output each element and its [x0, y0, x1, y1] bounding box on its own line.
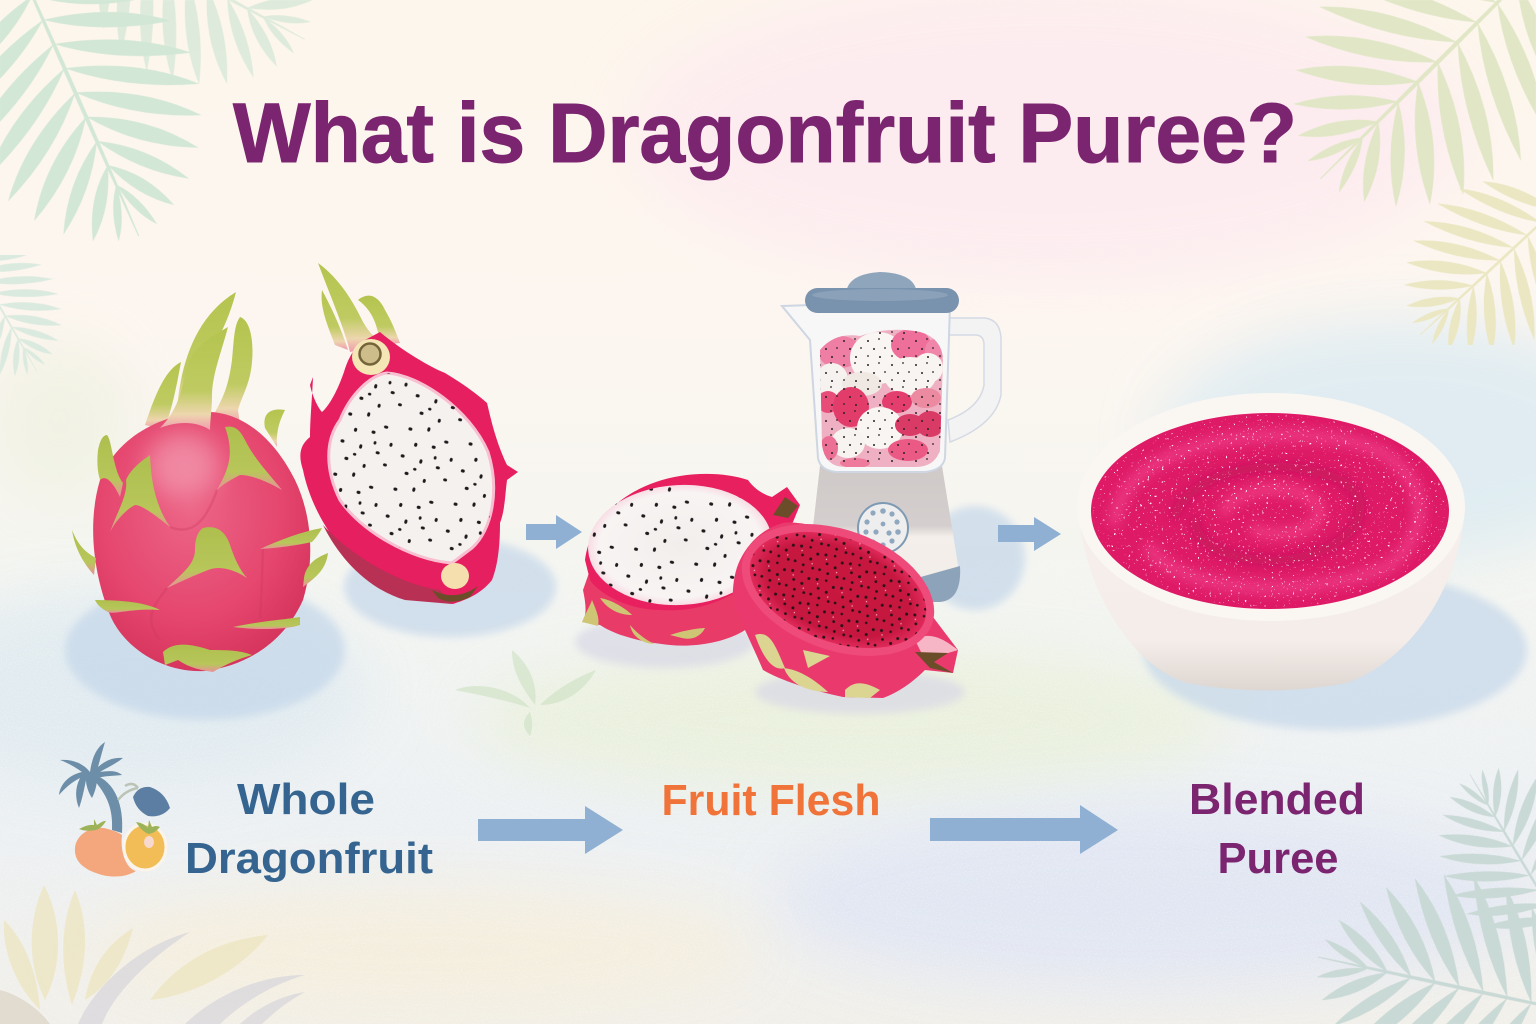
jar lid [805, 272, 959, 313]
palm trunk [92, 775, 122, 833]
skin base [582, 560, 790, 646]
base foot [915, 566, 960, 602]
blender base [808, 466, 959, 602]
green scale tips [72, 427, 328, 672]
bowl body [1078, 510, 1465, 690]
halved dragonfruit, left [300, 263, 518, 604]
jar with spout [782, 305, 950, 472]
skin [733, 523, 958, 698]
control dial [858, 503, 908, 553]
white flesh [585, 480, 775, 610]
stem [915, 652, 953, 673]
icon: tropical palm and fruits [59, 742, 170, 877]
faint leaves on table [455, 650, 596, 736]
leaf [118, 784, 170, 816]
label: whole dragonfruit: Whole [237, 775, 375, 824]
palm leaves: left middle [0, 255, 90, 385]
seeds [751, 532, 926, 648]
crown flames [145, 292, 285, 447]
label: whole dragonfruit: Dragonfruit [185, 834, 433, 883]
peach fruit [75, 819, 136, 877]
scale seams [151, 490, 263, 640]
shadows under fruits [65, 506, 1527, 730]
big arrow 1 [478, 806, 623, 854]
label: blended puree: Blended [1189, 775, 1365, 824]
puree surface [1091, 413, 1449, 609]
fruit pieces in jar [815, 328, 947, 470]
jar handle [947, 318, 1001, 442]
red flesh [734, 510, 942, 670]
palm leaves: bottom right [1305, 755, 1536, 1024]
palm leaves: top right [1265, 0, 1536, 345]
darker lower skin [323, 525, 452, 604]
yellow fruit [124, 820, 166, 870]
puree swirl [1115, 435, 1419, 588]
palm leaves: bottom left [0, 885, 305, 1024]
puree speckle [1093, 415, 1447, 607]
bowl of puree [1077, 393, 1465, 690]
seeds [333, 373, 490, 550]
big arrow 2 [930, 805, 1118, 854]
red-fleshed half [732, 522, 958, 698]
whole dragonfruit [72, 292, 328, 672]
pink rim [585, 474, 800, 610]
seeds [592, 487, 754, 604]
label: fruit flesh: Fruit Flesh [662, 776, 880, 825]
skin patches [755, 634, 880, 698]
white-fleshed half [582, 474, 800, 646]
pale rim highlight [915, 636, 958, 660]
front flame [160, 327, 228, 430]
label: whole dragonfruit [185, 775, 433, 883]
blender [782, 272, 1001, 602]
bowl rim [1077, 393, 1465, 621]
white flesh [329, 373, 494, 563]
fruit body [93, 412, 310, 671]
palm leaves: top left [0, 0, 420, 275]
pink skin rim [300, 332, 518, 604]
label: blended puree: Puree [1218, 834, 1338, 883]
palm leaves [59, 742, 123, 808]
stem flames [318, 263, 400, 352]
stem [773, 497, 798, 518]
body highlight [147, 433, 219, 497]
inner rim [724, 499, 952, 681]
small arrow 1 [526, 515, 582, 549]
stem scar [352, 339, 390, 375]
skin patches [582, 598, 705, 644]
bottom stem [432, 563, 478, 602]
small arrow 2 [998, 517, 1061, 551]
label: blended puree [1189, 775, 1365, 883]
title: What is Dragonfruit Puree? [233, 86, 1297, 180]
